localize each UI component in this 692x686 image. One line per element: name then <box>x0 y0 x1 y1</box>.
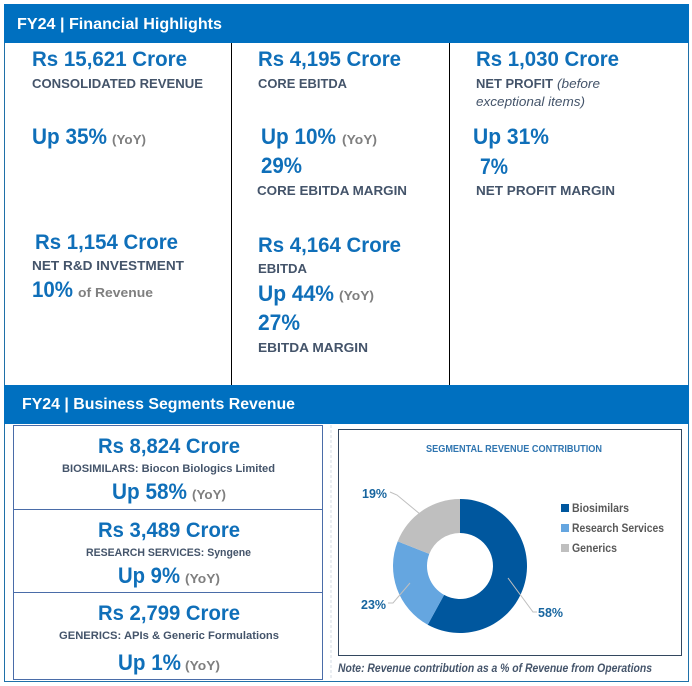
metric: core EBITDA: 29% <box>261 153 302 178</box>
segment: research services <box>86 519 251 588</box>
segment: biosimilars: Up 58% <box>112 479 187 504</box>
percentage labels: 58% <box>538 605 563 620</box>
metric: net profit: NET PROFIT <box>476 77 553 91</box>
metric: core EBITDA: Up 10% <box>261 124 336 149</box>
metric: consolidated revenue <box>32 48 203 149</box>
panel: business segments header: FY24 | Business Segments Revenue <box>22 396 295 413</box>
metric: net profit: 7% <box>480 154 508 179</box>
metric: net R&D investment: 10% <box>32 277 73 302</box>
percentage labels <box>361 486 563 620</box>
metric: core EBITDA: (YoY) <box>342 133 377 147</box>
metric: consolidated revenue: (YoY) <box>112 133 146 147</box>
metric: core EBITDA: CORE EBITDA <box>258 77 347 91</box>
metric: consolidated revenue: CONSOLIDATED REVENUE <box>32 77 203 91</box>
panel: donut chart <box>338 430 682 656</box>
segment: generics: GENERICS: APIs & Generic Formulations <box>59 630 279 642</box>
column dividers <box>232 43 450 385</box>
metric: net profit: Rs 1,030 Crore <box>476 48 619 71</box>
metric: EBITDA: EBITDA MARGIN <box>258 341 368 355</box>
donut: research services 23% <box>393 541 444 625</box>
metric: consolidated revenue: Up 35% <box>32 124 107 149</box>
metric: net R&D investment: NET R&D INVESTMENT <box>32 259 184 273</box>
metric: EBITDA: (YoY) <box>339 289 374 303</box>
metric: EBITDA: 27% <box>258 310 300 335</box>
note: Note: Revenue contribution as a % of Revenue from Operations <box>338 661 652 675</box>
segment: biosimilars: BIOSIMILARS: Biocon Biologics Limited <box>62 463 275 475</box>
panel: financial highlights header <box>4 4 689 43</box>
metric: EBITDA: EBITDA <box>258 262 307 276</box>
metric: EBITDA <box>258 234 401 355</box>
metric: EBITDA: Up 44% <box>258 281 334 306</box>
segment: generics: Rs 2,799 Crore <box>98 602 240 625</box>
segment: research services: Rs 3,489 Crore <box>98 519 240 542</box>
metric: net profit: NET PROFIT MARGIN <box>476 184 615 198</box>
segment: biosimilars <box>62 435 275 504</box>
metric: net profit <box>473 48 619 198</box>
panel: financial highlights header: FY24 | Financial Highlights <box>17 16 222 33</box>
metric: net profit: exceptional items) <box>476 95 585 109</box>
leader lines <box>388 492 537 612</box>
metric: net profit: Up 31% <box>473 124 549 149</box>
metric: EBITDA: Rs 4,164 Crore <box>258 234 401 257</box>
segment: biosimilars: (YoY) <box>192 488 226 502</box>
legend: Research Services <box>572 521 664 535</box>
panel: segment boxes <box>14 426 322 680</box>
metric: net R&D investment: Rs 1,154 Crore <box>35 231 178 254</box>
legend: Biosimilars <box>572 501 629 515</box>
segment: research services: Up 9% <box>118 563 180 588</box>
segment: generics: (YoY) <box>185 659 220 673</box>
donut: generics 19% <box>398 499 460 554</box>
segment: generics: Up 1% <box>118 650 181 675</box>
metric: net R&D investment <box>32 231 184 302</box>
donut: biosimilars 58% <box>428 499 527 633</box>
metric: net R&D investment: of Revenue <box>78 286 153 300</box>
percentage labels: 19% <box>362 486 387 501</box>
metric: consolidated revenue: Rs 15,621 Crore <box>32 48 187 71</box>
metric: core EBITDA <box>257 48 407 198</box>
segment: research services: (YoY) <box>185 572 220 586</box>
legend <box>561 501 664 555</box>
metric: net profit: (before <box>557 77 600 91</box>
panel: business segments header <box>4 385 689 424</box>
chart title: SEGMENTAL REVENUE CONTRIBUTION <box>426 444 602 455</box>
segment: generics <box>59 602 279 675</box>
metric: core EBITDA: Rs 4,195 Crore <box>258 48 401 71</box>
metric: core EBITDA: CORE EBITDA MARGIN <box>257 184 407 198</box>
segment: research services: RESEARCH SERVICES: Syngene <box>86 547 251 559</box>
legend: Generics <box>572 541 617 555</box>
percentage labels: 23% <box>361 597 386 612</box>
segment: biosimilars: Rs 8,824 Crore <box>98 435 240 458</box>
